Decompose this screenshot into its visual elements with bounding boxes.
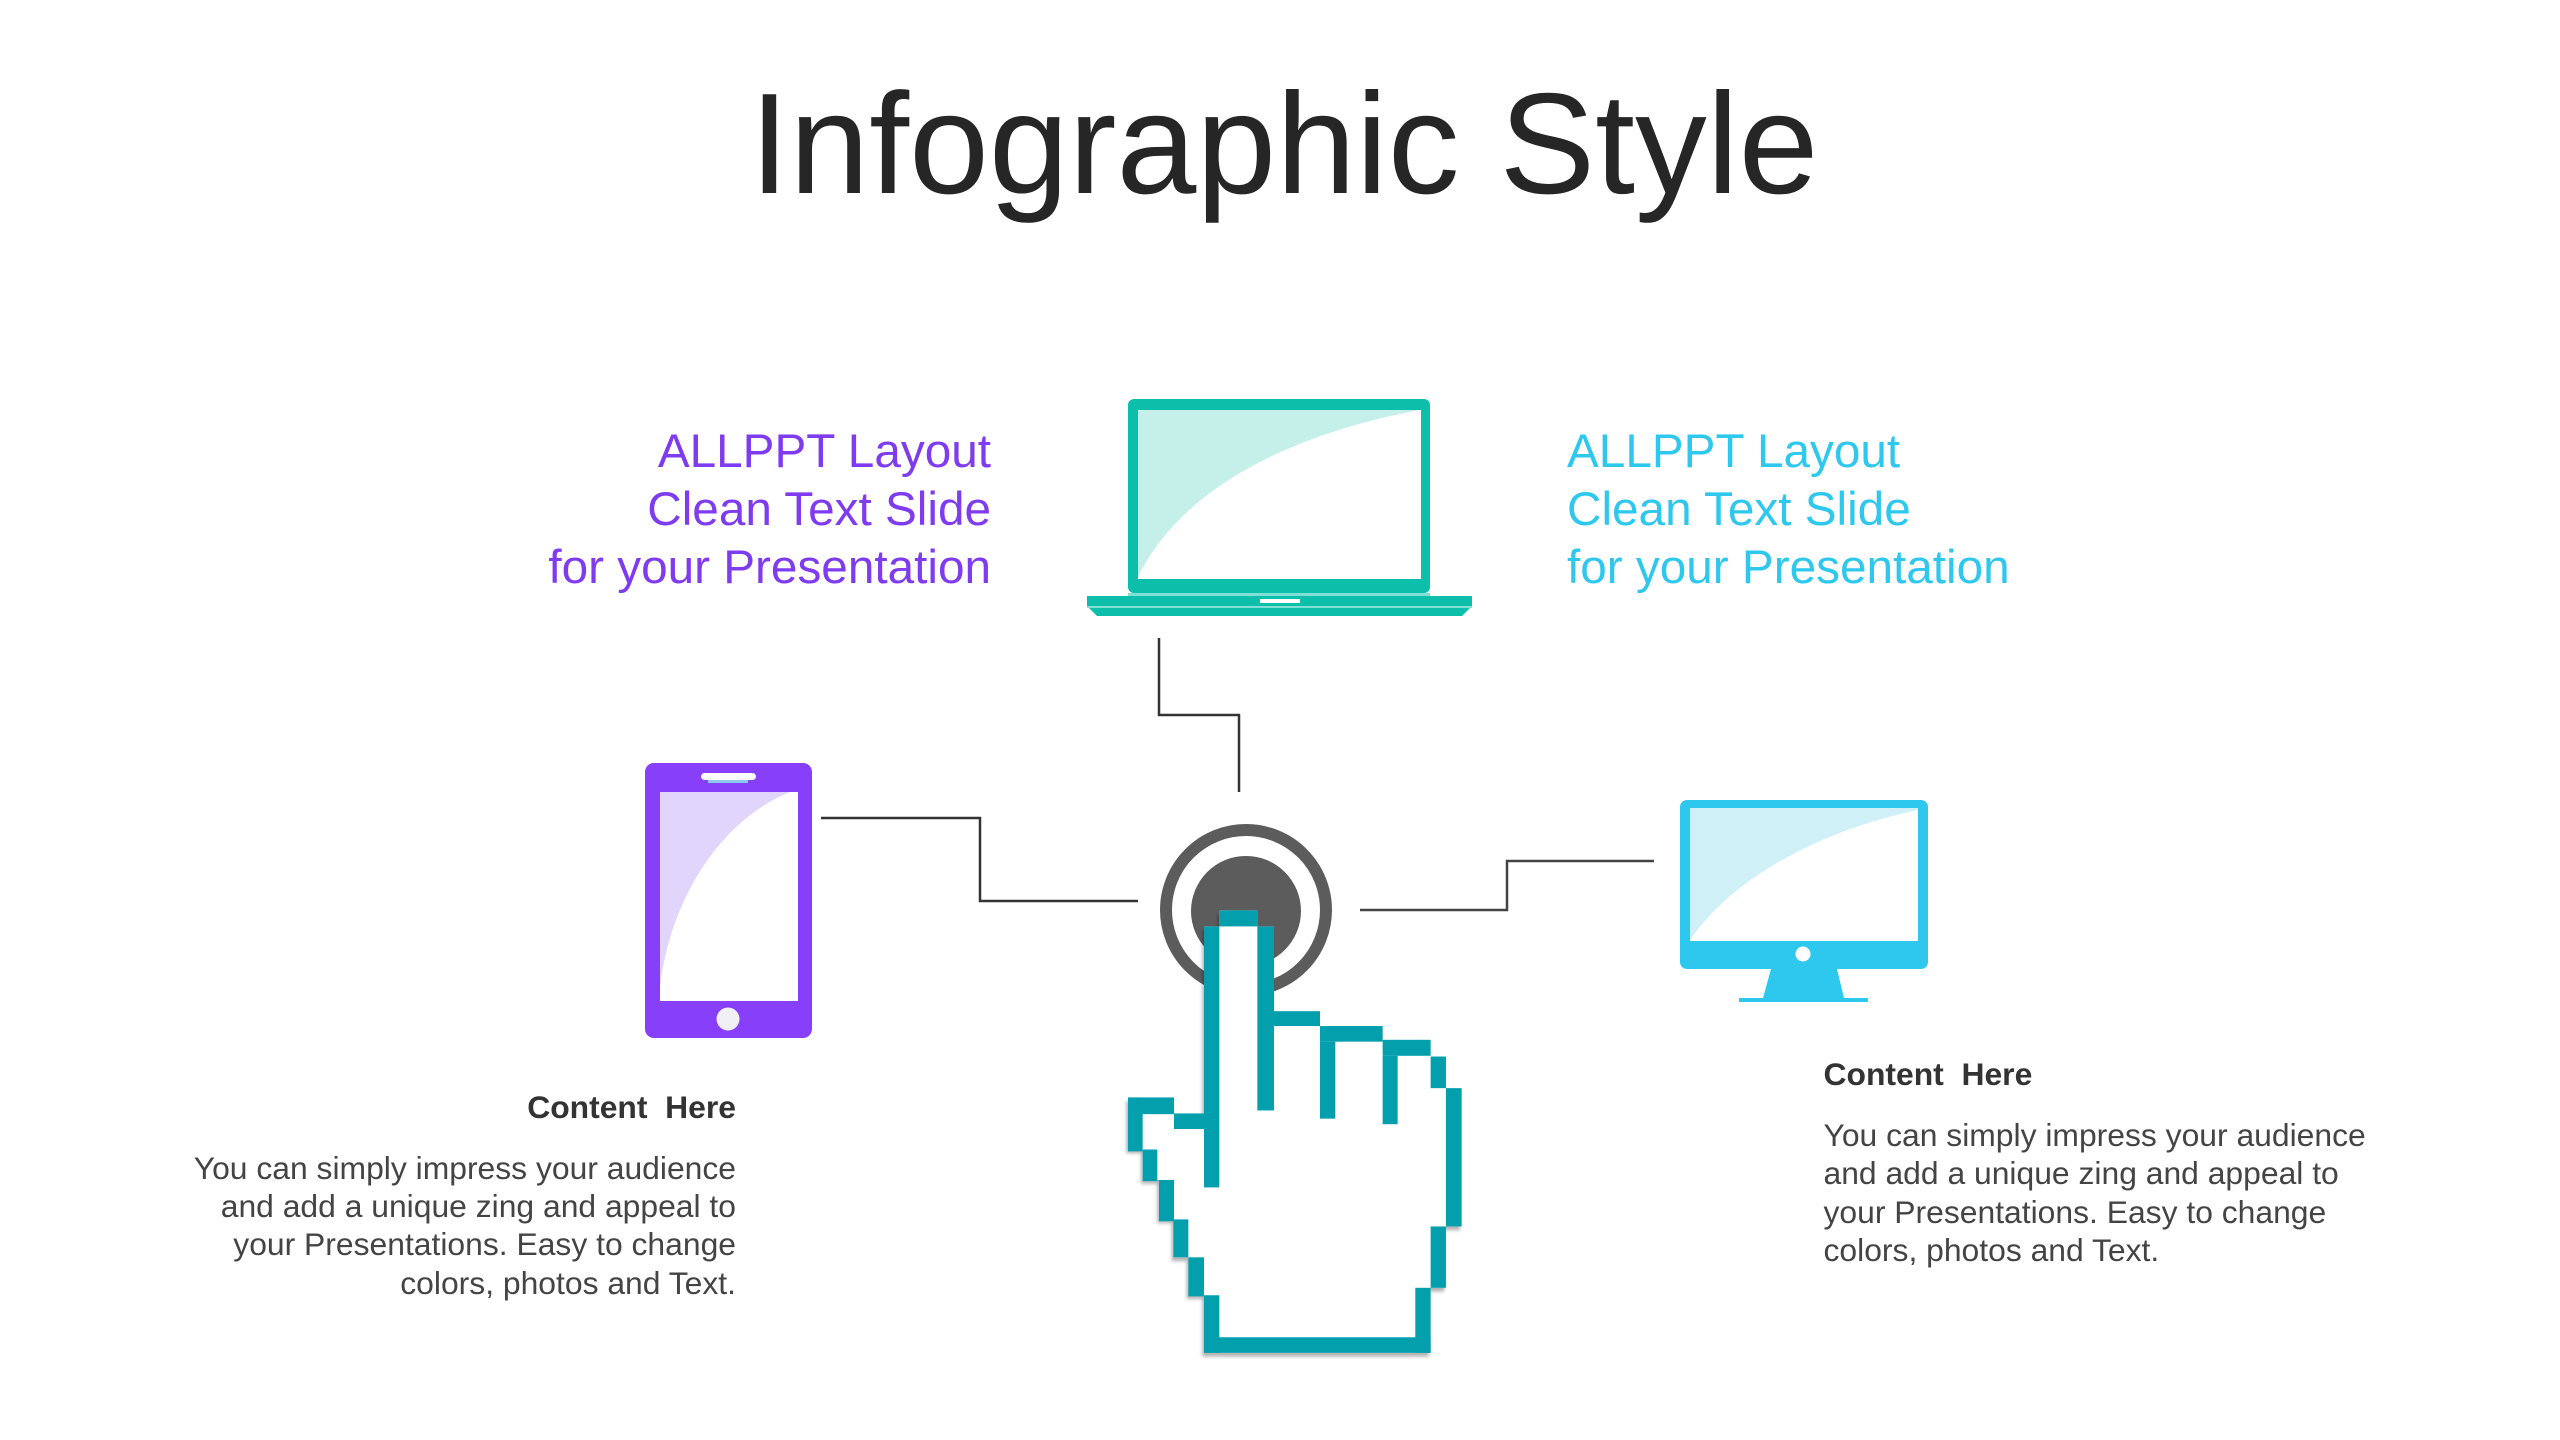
text block: right content (1824, 1056, 2366, 1268)
icon: laptop (1087, 399, 1472, 616)
icon: pixel hand cursor (1126, 910, 1462, 1357)
text block: right content: and add a unique zing and appeal to (1824, 1155, 2339, 1191)
text block: right content: You can simply impress your audience (1824, 1117, 2366, 1153)
text block: purple caption: ALLPPT Layout (658, 425, 991, 478)
text block: cyan caption: for your Presentation (1567, 541, 2010, 594)
text block: cyan caption (1567, 425, 2010, 594)
text block: right content: your Presentations. Easy to change (1824, 1194, 2326, 1230)
text block: purple caption: for your Presentation (548, 541, 991, 594)
text block: purple caption (548, 425, 991, 594)
text block: left content: colors, photos and Text. (400, 1265, 736, 1301)
text block: right content: colors, photos and Text. (1824, 1232, 2159, 1268)
text block: left content: You can simply impress your audience (194, 1150, 736, 1186)
text block: left content (194, 1089, 736, 1301)
connector: laptop to button (1159, 638, 1239, 792)
icon: smartphone (645, 763, 812, 1038)
text block: right content: Content Here (1824, 1056, 2032, 1092)
connector: button to monitor (1360, 861, 1654, 910)
icon: touch button (1166, 830, 1326, 990)
text block: left content: and add a unique zing and appeal to (221, 1188, 736, 1224)
text block: cyan caption: ALLPPT Layout (1567, 425, 1900, 478)
text block: left content: your Presentations. Easy to change (233, 1226, 736, 1262)
connector: phone to button (821, 818, 1138, 901)
title: Infographic Style (750, 64, 1818, 224)
text block: left content: Content Here (527, 1089, 736, 1125)
icon: desktop monitor (1680, 800, 1928, 1002)
text block: purple caption: Clean Text Slide (647, 483, 991, 536)
text block: cyan caption: Clean Text Slide (1567, 483, 1911, 536)
